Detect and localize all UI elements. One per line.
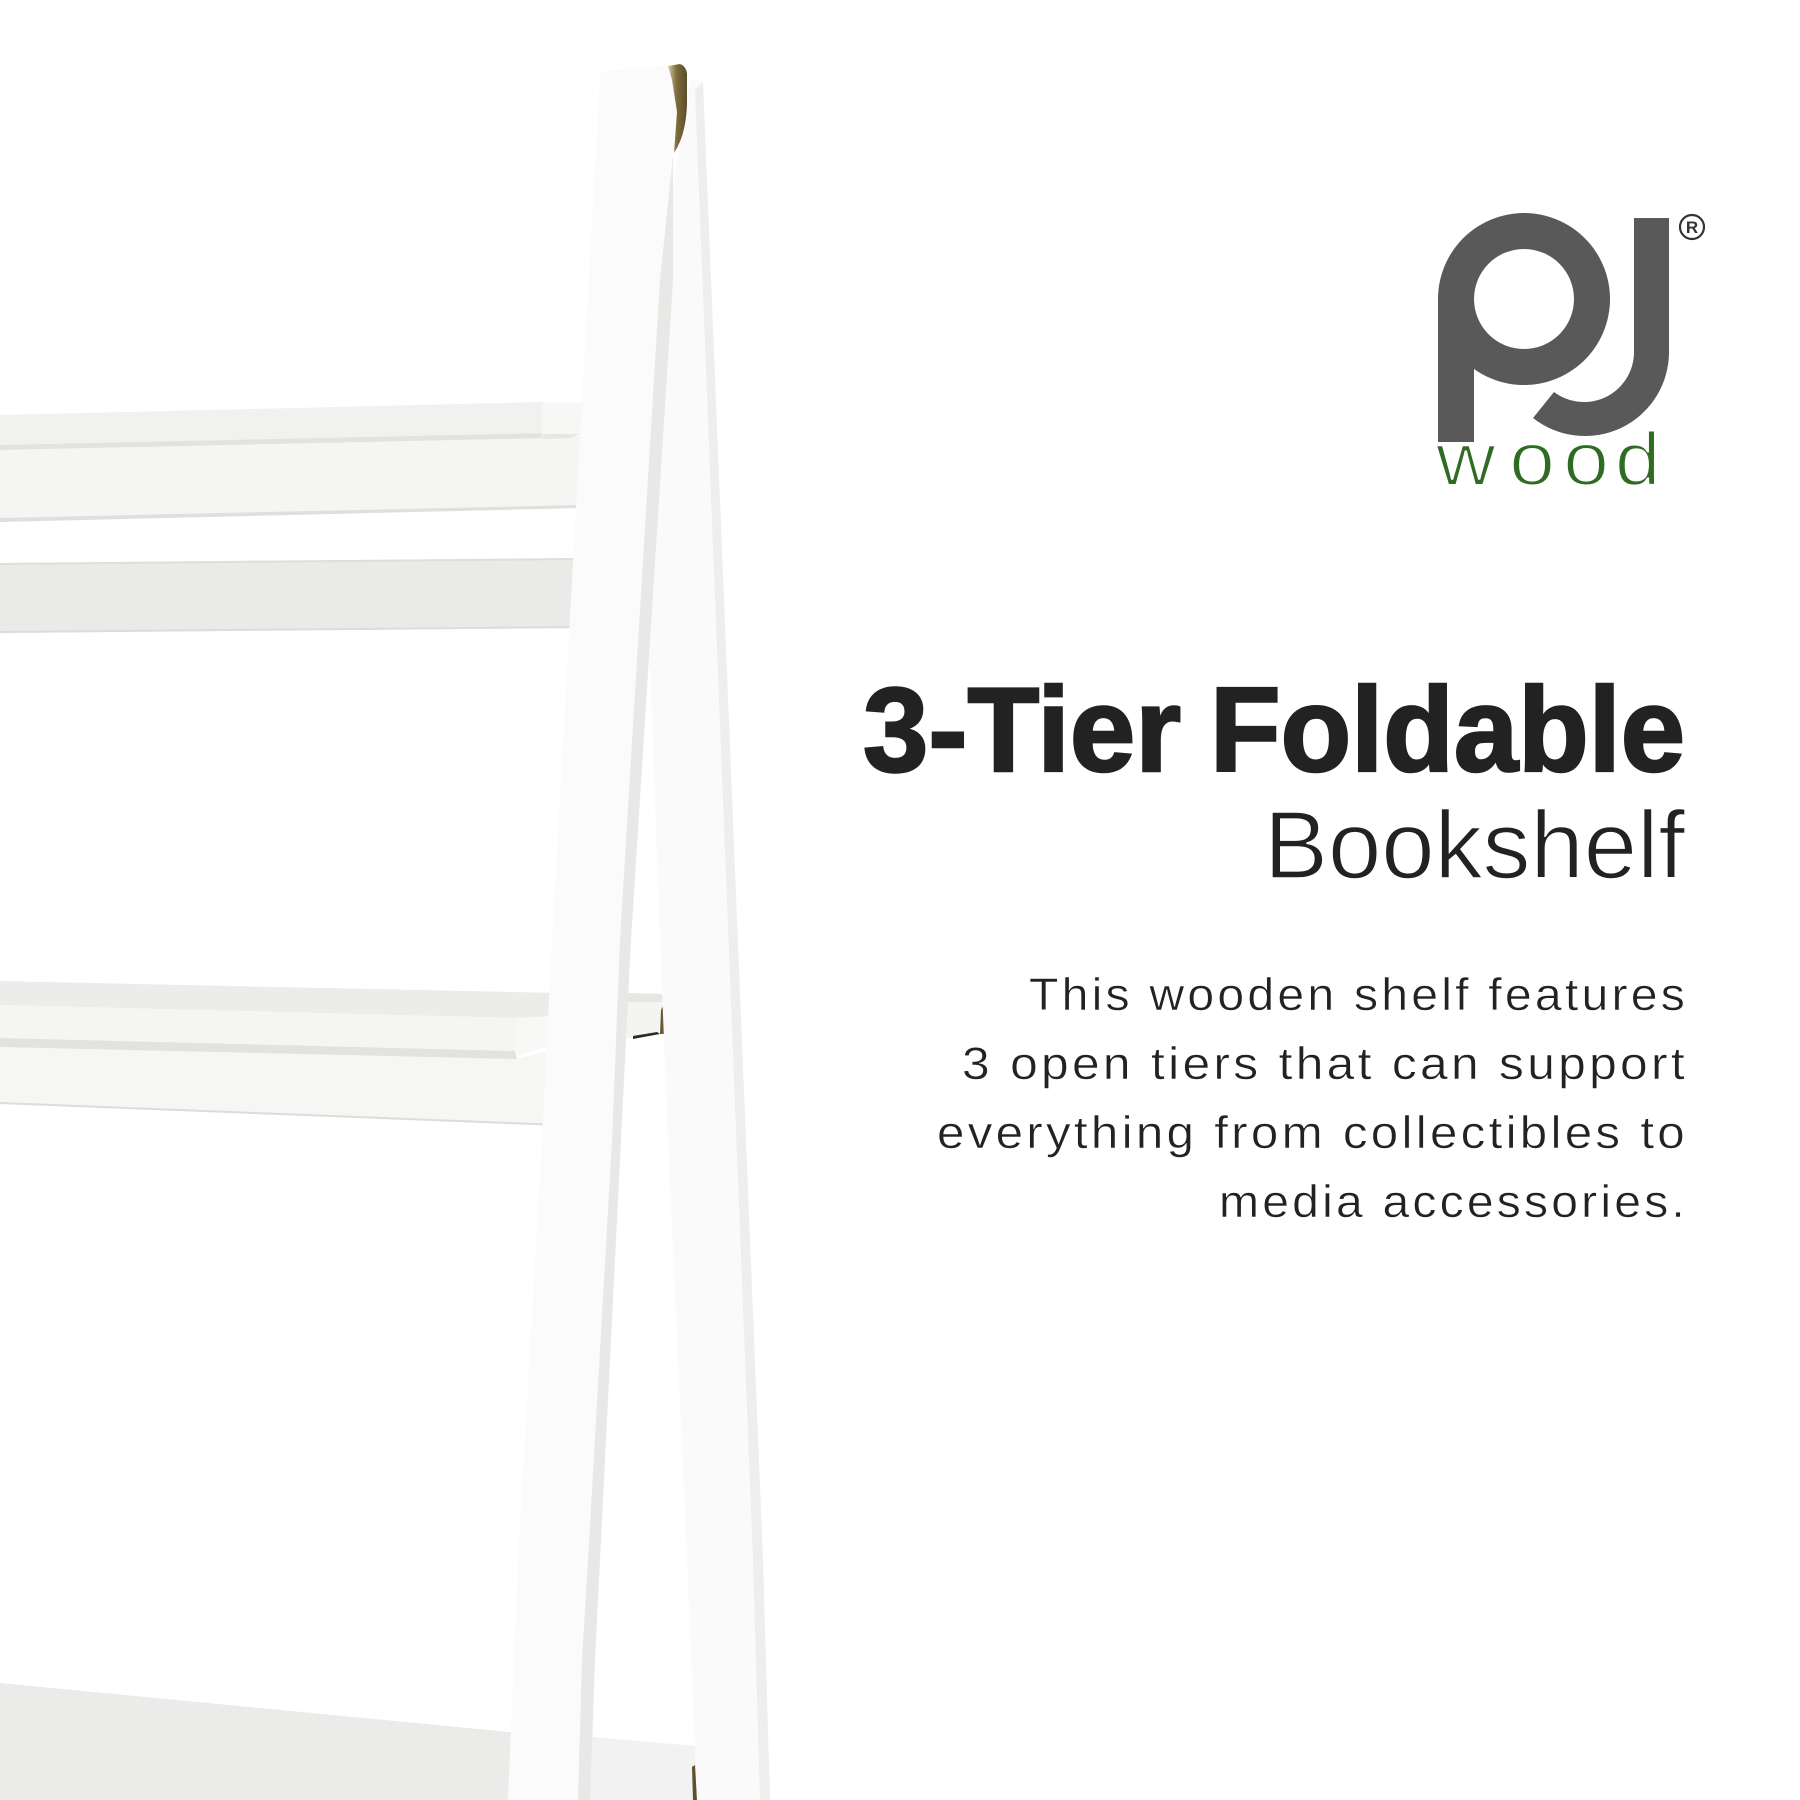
- logo wordmark: wood: [1435, 417, 1661, 501]
- shelf board: [0, 402, 545, 445]
- back shelf section, bottom tier: [575, 1736, 699, 1800]
- title: Foldable: [1210, 663, 1685, 797]
- back leg: [640, 79, 770, 1800]
- description text block: 3 open tiers that can support: [962, 1038, 1688, 1089]
- back shelf section, middle tier: [625, 993, 664, 1039]
- subtitle: Bookshelf: [1264, 792, 1685, 899]
- logo mark p: [1438, 213, 1610, 442]
- shelf top surface: [0, 981, 560, 1018]
- bottom shelf: [0, 1683, 520, 1800]
- leg shadow strip: [578, 155, 673, 1800]
- top shelf: [0, 402, 585, 633]
- upper back rail: [0, 436, 580, 522]
- front leg: [508, 66, 678, 1800]
- back rail: [0, 1047, 560, 1126]
- middle shelf: [0, 981, 560, 1126]
- photo: white ladder bookshelf: [0, 64, 770, 1800]
- brass hinge: [668, 64, 687, 153]
- registered mark: R: [1686, 218, 1698, 237]
- title: [863, 663, 1685, 797]
- description text block: This wooden shelf features: [1029, 969, 1688, 1020]
- description text block: media accessories.: [1219, 1176, 1688, 1227]
- description text block: [937, 969, 1688, 1227]
- shelf front edge: [0, 1005, 517, 1051]
- title: 3-Tier: [863, 663, 1181, 797]
- registered mark: [1680, 215, 1704, 239]
- lower back rail: [0, 558, 580, 633]
- description text block: everything from collectibles to: [937, 1107, 1688, 1158]
- logo mark j: [1533, 218, 1669, 436]
- logo: pj wood: [1435, 213, 1704, 501]
